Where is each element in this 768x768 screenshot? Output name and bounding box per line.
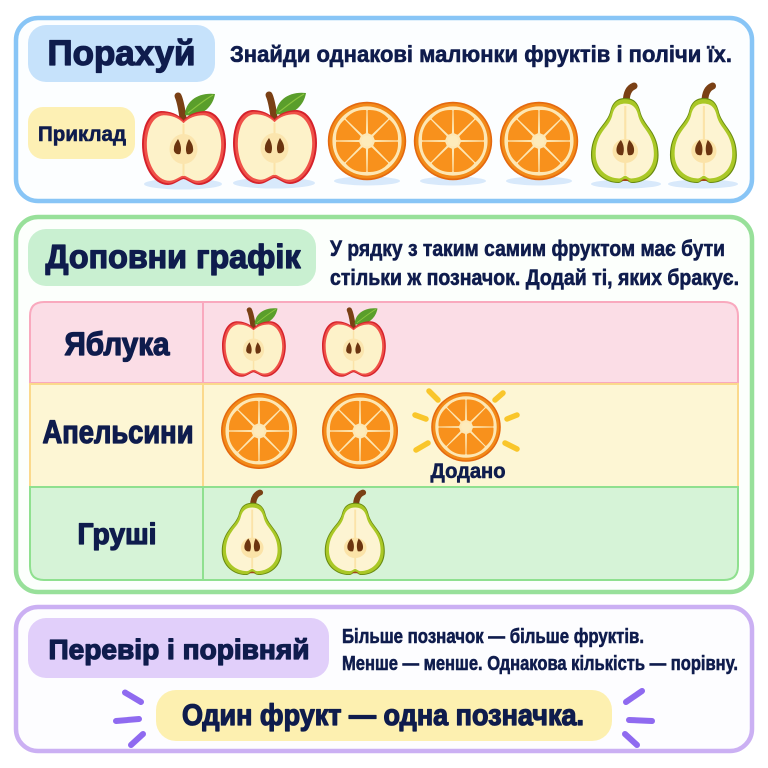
icon: apple bbox=[322, 308, 386, 377]
explanation text bbox=[342, 626, 738, 675]
added orange with rays bbox=[415, 391, 517, 462]
pictograph table bbox=[30, 302, 738, 580]
heading pill: Перевір і порівняй bbox=[28, 618, 329, 678]
label pill: Приклад bbox=[28, 107, 135, 159]
instruction text: У рядку з таким самим фруктом має бути bbox=[330, 236, 725, 261]
row: pears bbox=[30, 487, 738, 580]
rule pill bbox=[156, 690, 612, 741]
explanation text: Більше позначок — більше фруктів. bbox=[342, 626, 644, 648]
label pill: Приклад: Приклад bbox=[38, 123, 126, 146]
rule pill: Один фрукт — одна позначка. bbox=[182, 699, 584, 732]
icon: pear bbox=[222, 493, 282, 575]
heading pill: Перевір і порівняй: Перевір і порівняй bbox=[48, 634, 310, 665]
heading pill: Порахуй: Порахуй bbox=[48, 34, 196, 73]
icon: pear 1 bbox=[591, 86, 661, 188]
icon: pear 2 bbox=[668, 86, 738, 188]
icon: apple bbox=[222, 308, 286, 377]
accent rays left bbox=[116, 692, 143, 745]
label: Додано: Додано bbox=[430, 460, 506, 483]
row label: Груші: Груші bbox=[78, 518, 156, 551]
accent rays right bbox=[625, 691, 652, 745]
icon: apple 1 bbox=[142, 94, 226, 190]
panel: check and compare bbox=[16, 607, 752, 751]
icon: apple 2 bbox=[233, 93, 317, 188]
row: oranges bbox=[30, 384, 738, 487]
icon: orange 2 bbox=[414, 102, 492, 186]
example row of fruit bbox=[142, 86, 738, 190]
row label: Яблука: Яблука bbox=[64, 326, 170, 362]
panel: complete the chart bbox=[16, 217, 752, 592]
row: apples bbox=[30, 302, 738, 383]
heading pill: Доповни графік bbox=[28, 229, 316, 286]
icon: orange bbox=[221, 393, 297, 469]
icon: orange 1 bbox=[328, 102, 406, 186]
icon: orange 3 bbox=[500, 102, 578, 186]
row label: Апельсини: Апельсини bbox=[42, 414, 194, 450]
instruction text bbox=[330, 236, 739, 290]
instruction text: Знайди однакові малюнки фруктів і полічи їх. bbox=[230, 41, 732, 67]
icon: pear bbox=[325, 493, 385, 575]
heading pill: Порахуй bbox=[28, 25, 215, 82]
icon: orange bbox=[322, 393, 398, 469]
heading pill: Доповни графік: Доповни графік bbox=[46, 238, 301, 275]
panel: count bbox=[16, 18, 752, 201]
